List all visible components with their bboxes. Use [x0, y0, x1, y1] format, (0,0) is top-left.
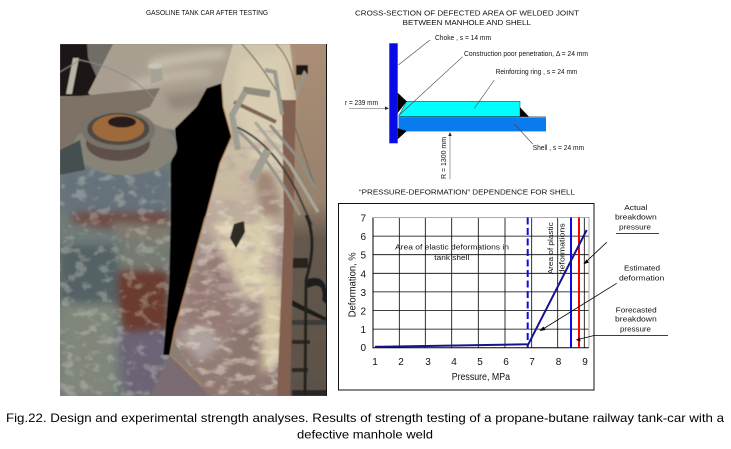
- photo upper tank surface: [88, 44, 233, 130]
- arrow: inner radius: [349, 106, 389, 110]
- arrow: shell radius: [448, 132, 452, 179]
- callout: actual breakdown pressure: [583, 203, 659, 264]
- x axis numbers: 2: [398, 357, 404, 368]
- label: shell: Shell , s = 24 mm: [533, 143, 584, 152]
- label: inner radius: r = 239 mm: [345, 98, 378, 107]
- figure caption: defective manhole weld: [297, 428, 433, 442]
- x axis title: Pressure, MPa: [452, 372, 510, 383]
- cross-section heading: CROSS-SECTION OF DEFECTED AREA OF WELDED JOINT: [355, 9, 579, 18]
- photo black edge: [326, 44, 327, 396]
- cross-section diagram: [345, 33, 588, 179]
- elastic area label: tank shell: [434, 253, 470, 262]
- x axis numbers: 3: [425, 357, 431, 368]
- photo heading: GASOLINE TANK CAR AFTER TESTING: [146, 8, 268, 17]
- elastic area label: Area of elastic deformations in: [395, 242, 509, 251]
- callout: estimated deformation: Estimated: [624, 264, 660, 273]
- chart heading: “PRESSURE-DEFORMATION” DEPENDENCE FOR SHELL: [359, 187, 575, 196]
- photo background on the right: [288, 44, 327, 396]
- chart grid: [373, 218, 589, 348]
- x axis numbers: 6: [503, 357, 509, 368]
- callout: forecasted breakdown pressure: pressure: [620, 325, 651, 334]
- plastic area label: [546, 222, 566, 274]
- chart frame: [338, 204, 594, 390]
- reinforcing ring: [398, 101, 520, 117]
- label: choke: Choke , s = 14 mm: [435, 33, 491, 42]
- callout: actual breakdown pressure: breakdown: [615, 212, 657, 222]
- welds: [398, 93, 529, 139]
- photo: ruptured gasoline tank car: [60, 44, 327, 396]
- choke wall: [389, 43, 398, 143]
- y axis numbers: [360, 214, 366, 354]
- label: reinforcing ring: Reinforcing ring , s = 24 mm: [496, 67, 577, 76]
- x axis numbers: 1: [372, 357, 378, 368]
- photo tear opening: [163, 83, 232, 355]
- y axis numbers: 6: [360, 232, 366, 243]
- photo dark upper-left corner: [60, 44, 120, 96]
- x axis numbers: 7: [529, 357, 535, 368]
- root gap: [398, 116, 520, 118]
- callout: forecasted breakdown pressure: breakdown: [615, 315, 657, 324]
- y axis numbers: 7: [360, 214, 366, 225]
- lack of penetration: [398, 114, 399, 128]
- forecasted breakdown line: [578, 218, 580, 348]
- photo lower-left tank shell: [60, 130, 210, 396]
- callout: forecasted breakdown pressure: [576, 306, 668, 341]
- actual breakdown line: [570, 218, 572, 348]
- x axis numbers: 8: [556, 357, 562, 368]
- callout: forecasted breakdown pressure: Forecasted: [616, 306, 657, 315]
- cross-section heading: [355, 9, 579, 27]
- figure caption: Fig.22. Design and experimental strength analyses. Results of strength testing of a propane-butane railway tank-car with a: [6, 411, 724, 425]
- callout: actual breakdown pressure: Actual: [624, 203, 648, 212]
- callout: estimated deformation: [540, 264, 664, 331]
- y axis numbers: 5: [360, 250, 366, 262]
- y axis numbers: 4: [360, 270, 366, 280]
- y axis title: Deformation, %: [348, 252, 359, 317]
- callout: actual breakdown pressure: pressure: [619, 222, 651, 232]
- y axis numbers: 1: [360, 325, 366, 336]
- x axis numbers: 9: [582, 357, 588, 368]
- deformation curve: [375, 230, 587, 347]
- shell plate: [398, 117, 546, 131]
- photo external pipework: [60, 44, 318, 396]
- label: shell radius: R = 1300 mm: [439, 137, 448, 179]
- photo manhole and flange: [60, 63, 177, 175]
- x axis numbers: [372, 357, 588, 368]
- y axis numbers: 2: [360, 306, 366, 318]
- y axis numbers: 0: [360, 343, 366, 354]
- figure caption: [6, 411, 724, 442]
- x axis numbers: 4: [451, 357, 457, 368]
- label: construction penetration: Construction poor penetration, Δ = 24 mm: [464, 49, 588, 58]
- callout: estimated deformation: deformation: [619, 274, 664, 283]
- elastic limit dashed line: [527, 218, 529, 348]
- photo small bracket on shell: [230, 221, 245, 248]
- plastic area label: deformations: [557, 223, 566, 274]
- elastic area label: [395, 242, 509, 262]
- photo right tank shell: [172, 44, 296, 396]
- leader lines: [398, 40, 533, 144]
- y axis numbers: 3: [360, 288, 366, 299]
- cross-section heading: BETWEEN MANHOLE AND SHELL: [403, 18, 531, 27]
- plastic area label: Area of plastic: [546, 222, 555, 274]
- chart: pressure-deformation: [338, 204, 594, 390]
- x axis numbers: 5: [477, 357, 483, 368]
